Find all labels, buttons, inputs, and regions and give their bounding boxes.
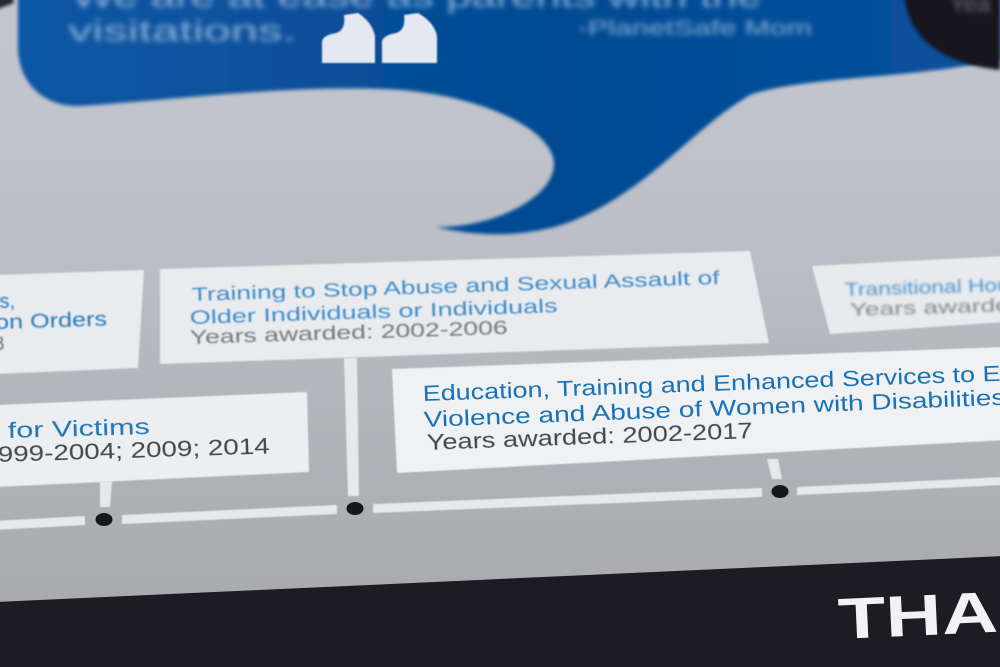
card years: Years awarded: 2002-2017 bbox=[426, 418, 753, 455]
panel: Protection Orders grant card bbox=[0, 270, 144, 374]
card years: 999-2004; 2009; 2014 bbox=[0, 433, 270, 467]
speech bubble shape bbox=[18, 0, 1000, 234]
panel: Services for Victims grant card bbox=[0, 392, 309, 487]
card title bbox=[189, 268, 721, 329]
stems bbox=[100, 481, 112, 507]
timeline bbox=[0, 358, 1000, 530]
timeline dot: third bbox=[772, 485, 788, 498]
card title: for Victims bbox=[7, 414, 150, 443]
panel: dark top-right corner shape bbox=[904, 0, 1000, 70]
card title: Education, Training and Enhanced Services to End bbox=[422, 360, 1000, 406]
card title: Violence and Abuse of Women with Disabilities bbox=[423, 385, 1000, 432]
card title: Older Individuals or Individuals bbox=[189, 296, 558, 329]
panel: Training to Stop Abuse grant card bbox=[160, 251, 769, 364]
panel: Transitional Housing grant card bbox=[812, 256, 1000, 334]
timeline line segments bbox=[0, 358, 1000, 530]
timeline dot: first bbox=[96, 513, 112, 526]
panel: quote speech bubble bbox=[18, 0, 1000, 234]
timeline dot: second bbox=[346, 502, 364, 515]
icon: closing quote marks bbox=[322, 13, 437, 63]
panel: Education, Training and Enhanced Services grant card bbox=[392, 347, 1000, 473]
card title: Training to Stop Abuse and Sexual Assault of bbox=[191, 268, 721, 306]
quote text bbox=[68, 0, 762, 48]
footer band bbox=[0, 556, 1000, 667]
dark top-left corner bbox=[0, 0, 14, 10]
card years: Years awarded: 2002-2006 bbox=[189, 318, 508, 349]
card title bbox=[422, 360, 1000, 432]
card title: Transitional Hou bbox=[845, 275, 1000, 300]
card years: Years awarde bbox=[850, 295, 1000, 320]
quote attribution: -PlanetSafe Mom bbox=[578, 17, 812, 40]
card title bbox=[0, 288, 107, 334]
quote text: visitations. bbox=[68, 13, 296, 48]
